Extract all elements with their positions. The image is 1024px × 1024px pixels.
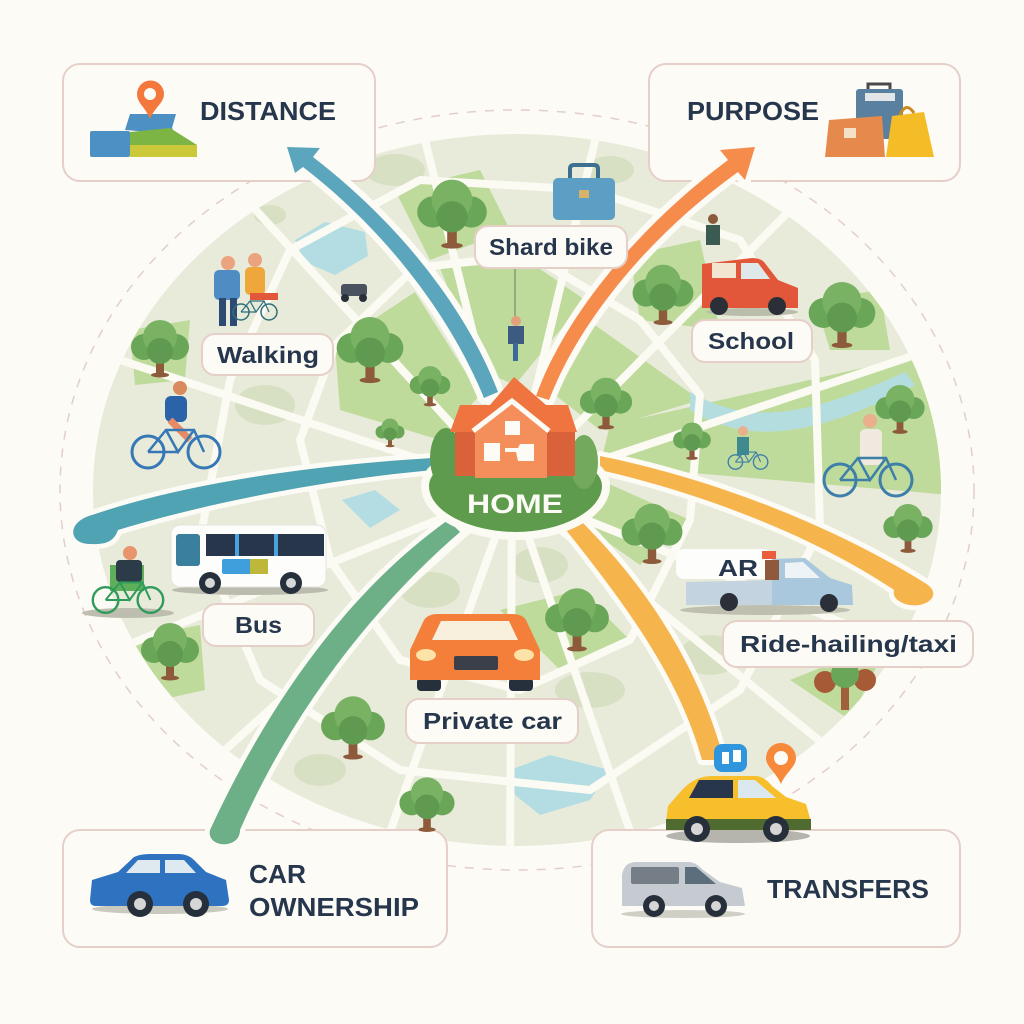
label: walking xyxy=(202,334,333,375)
text: purpose: PURPOSE xyxy=(687,96,819,126)
text: home: HOME xyxy=(467,489,563,519)
green base xyxy=(425,448,606,536)
arrow: purpose xyxy=(536,147,755,400)
label: ride-hailing taxi xyxy=(723,621,973,667)
river xyxy=(690,372,915,432)
icon: briefcase xyxy=(553,165,615,220)
house walls xyxy=(455,428,575,476)
house front xyxy=(475,403,547,478)
icon: map with pin xyxy=(90,80,197,157)
darker block patches xyxy=(235,154,740,786)
water features xyxy=(295,222,610,815)
vehicle: red suv xyxy=(702,258,798,316)
trees xyxy=(131,180,933,832)
cyclist: left xyxy=(132,381,220,468)
cyclist: green bike xyxy=(82,546,174,618)
label: school xyxy=(692,320,812,362)
home marker xyxy=(425,377,606,536)
neighbourhood map xyxy=(80,120,960,860)
green park areas xyxy=(125,170,950,720)
panel: distance xyxy=(63,64,375,181)
icon: orange location pin xyxy=(766,743,796,784)
dashed map boundary xyxy=(60,110,974,870)
label: shared bike xyxy=(475,226,627,268)
arrow: distance xyxy=(287,147,498,398)
panel: purpose xyxy=(649,64,960,181)
vehicle: yellow taxi xyxy=(666,776,811,843)
windows xyxy=(505,421,520,435)
label: bus xyxy=(203,604,314,646)
label: ride-hailing taxi: Ride-hailing/taxi xyxy=(740,631,957,657)
icon: blue car xyxy=(90,854,229,917)
small scooter figure xyxy=(341,284,367,302)
text: transfers: TRANSFERS xyxy=(767,874,929,904)
leader line and figure below shared bike label xyxy=(508,268,524,361)
people: walking pair xyxy=(214,253,278,326)
vehicle: orange private car xyxy=(410,614,540,691)
tree: autumn tree below taxi label xyxy=(814,660,876,710)
road network xyxy=(120,140,912,846)
roof xyxy=(450,377,577,432)
arrow: right orange route xyxy=(600,456,933,605)
arrow: left teal route xyxy=(73,458,434,544)
label: walking: Walking xyxy=(217,342,319,368)
label: shared bike: Shard bike xyxy=(489,234,613,260)
panel: car ownership xyxy=(63,830,447,947)
arrow: yellow taxi route xyxy=(566,522,724,760)
label: private car xyxy=(406,699,578,743)
label: school: School xyxy=(708,328,794,354)
cyclist: right xyxy=(824,414,912,496)
arrow: green car route xyxy=(210,520,460,844)
label: bus: Bus xyxy=(235,612,282,638)
icon: bags xyxy=(825,84,934,157)
side bushes xyxy=(430,428,462,488)
small figure top right xyxy=(706,214,720,245)
cyclist: centre right xyxy=(728,426,768,469)
vehicle: car and truck with CAR sign xyxy=(676,549,853,615)
text: distance: DISTANCE xyxy=(200,96,336,126)
text: car ownership: CAR xyxy=(249,859,306,889)
icon: blue map badge xyxy=(714,744,747,772)
text: car sign: AR xyxy=(718,555,758,581)
text: car ownership xyxy=(249,859,419,922)
vehicle: bus xyxy=(171,525,328,595)
text: car ownership: OWNERSHIP xyxy=(249,892,419,922)
label: private car: Private car xyxy=(423,708,562,734)
panel: transfers xyxy=(592,830,960,947)
icon: silver van xyxy=(621,862,745,918)
